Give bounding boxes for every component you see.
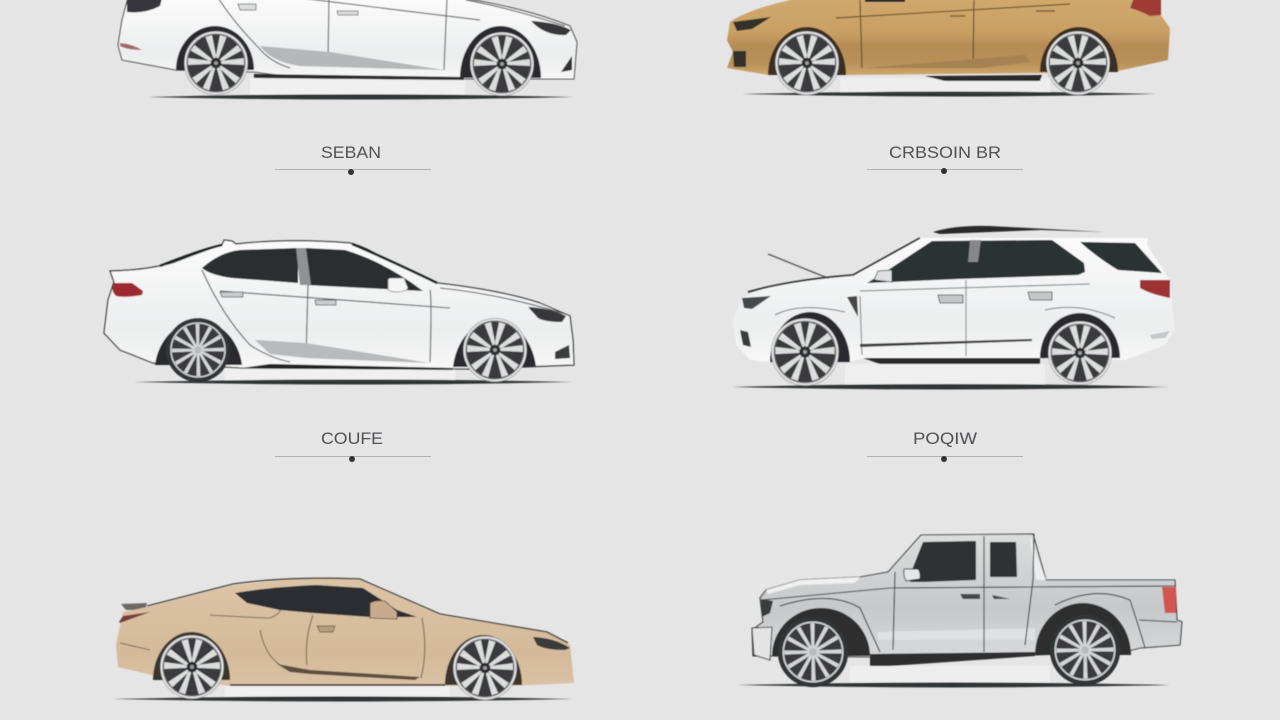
label: COUFE	[275, 429, 431, 462]
crossover front wheel arch	[768, 27, 846, 75]
SUV rear wheel arch	[1040, 313, 1120, 358]
beige coupe rear wheel arch	[153, 632, 230, 680]
SUV body	[733, 238, 1175, 362]
label text: CRBSOIN BR	[889, 143, 1001, 162]
label text: POQIW	[913, 429, 977, 448]
coupe pillar	[296, 248, 311, 285]
crossover body	[727, 0, 1170, 75]
car: white SUV, middle right	[732, 226, 1175, 390]
SUV door handles	[938, 292, 1052, 303]
under-car glow	[225, 368, 455, 380]
coupe sill shading	[255, 340, 430, 363]
ground shadow	[148, 94, 574, 100]
coupe door handles	[220, 292, 336, 305]
car: silver pickup, bottom right	[738, 534, 1182, 688]
divider dot	[941, 456, 947, 462]
pickup front wheel arch	[772, 608, 870, 656]
SUV grille	[740, 330, 751, 347]
pickup headlamp	[761, 599, 773, 617]
crossover rear wheel arch	[1040, 27, 1118, 72]
sedan body	[118, 0, 577, 79]
divider dot	[348, 169, 354, 175]
SUV side windows	[867, 240, 1085, 283]
pickup rear wheel	[1050, 615, 1120, 685]
beige coupe door lines	[120, 610, 425, 678]
SUV rear window	[1080, 242, 1162, 273]
pickup tail lamp	[1162, 587, 1176, 613]
beige coupe sill shade	[277, 664, 420, 680]
label: CRESOIN BR	[867, 143, 1023, 174]
under-car glow	[850, 666, 1050, 682]
coupe rear wheel	[166, 318, 230, 382]
beige coupe underside	[230, 684, 445, 686]
coupe door and belt lines	[202, 270, 565, 362]
pickup rear wheel arch	[1035, 603, 1131, 655]
sedan details	[218, 0, 565, 70]
sedan lower reflector	[120, 43, 142, 50]
SUV roof rail	[933, 226, 1105, 234]
divider line	[867, 169, 1023, 170]
car: gold crossover, top right	[727, 0, 1170, 96]
divider line	[867, 456, 1023, 457]
crossover headlamp	[733, 17, 771, 31]
ground shadow	[742, 92, 1155, 96]
pickup body lines	[762, 534, 1177, 652]
pickup hood highlight	[766, 577, 860, 594]
coupe body	[104, 240, 574, 369]
sedan tail lamp	[127, 0, 162, 12]
coupe front wheel	[463, 318, 527, 382]
ground shadow	[113, 696, 573, 702]
SUV headlamp	[742, 296, 771, 309]
sedan sill shading	[260, 46, 444, 70]
beige coupe door handle	[317, 626, 335, 632]
label text: SEBAN	[321, 143, 381, 162]
SUV fender vent	[847, 296, 858, 317]
crossover front wheel	[775, 31, 839, 95]
pickup front wheel	[778, 617, 848, 687]
sedan underside	[254, 74, 464, 80]
SUV mirror	[874, 270, 892, 282]
crossover details	[836, 0, 1070, 68]
SUV hood edge	[748, 238, 920, 292]
SUV rear reflector	[1150, 331, 1170, 339]
crossover underside	[925, 75, 1042, 81]
under-car glow	[250, 78, 465, 94]
coupe roof line	[160, 244, 437, 283]
sedan door handles	[238, 4, 358, 15]
crossover rear wheel	[1046, 31, 1110, 95]
sedan rear wheel arch	[176, 26, 254, 70]
sedan grille	[561, 56, 572, 72]
label text: COUFE	[321, 429, 383, 448]
coupe front window	[306, 248, 423, 291]
ground shadow	[732, 384, 1168, 390]
pickup door handles	[960, 594, 1010, 599]
pickup mirror	[904, 569, 920, 581]
pickup front bumper	[752, 627, 772, 660]
coupe headlamp	[528, 307, 566, 322]
pickup cab highlight	[1030, 536, 1046, 580]
crossover window sliver	[865, 0, 905, 2]
ground shadow	[134, 380, 572, 384]
label: POQIW	[867, 429, 1023, 462]
beige coupe headlamp	[533, 637, 570, 650]
car: white coupe-style sedan, middle left	[104, 240, 574, 384]
divider dot	[941, 168, 947, 174]
beige coupe body	[116, 577, 574, 686]
car: beige coupe, bottom left	[113, 577, 574, 702]
car: white sedan, top left	[118, 0, 577, 100]
ground shadow	[738, 682, 1170, 688]
beige coupe mirror	[370, 601, 397, 619]
coupe mirror	[388, 278, 408, 292]
coupe rear window	[202, 248, 298, 283]
SUV front wheel	[771, 318, 839, 386]
SUV side strip	[860, 339, 1032, 347]
coupe grille	[555, 345, 570, 359]
pickup front window	[910, 541, 976, 582]
label: SEBAN	[275, 143, 431, 175]
beige coupe tail lamp	[119, 612, 150, 623]
divider line	[275, 169, 431, 170]
SUV underside	[863, 358, 1040, 364]
sedan front wheel	[470, 32, 534, 96]
pickup lower highlight	[878, 628, 1035, 640]
sedan front wheel arch	[460, 26, 541, 78]
coupe front wheel arch	[453, 320, 536, 367]
sedan rear wheel	[184, 31, 248, 95]
SUV open hood line	[768, 254, 830, 279]
SUV rear wheel	[1048, 321, 1112, 385]
divider dot	[349, 456, 355, 462]
pickup rear window	[990, 542, 1017, 577]
crossover tail lamp	[1130, 0, 1161, 16]
pickup body	[752, 534, 1182, 657]
beige coupe front wheel	[453, 636, 517, 700]
divider line	[275, 456, 431, 457]
spoiler	[121, 603, 147, 610]
SUV front wheel arch	[770, 312, 850, 362]
beige coupe rear wheel	[160, 635, 224, 699]
coupe underside	[242, 364, 453, 370]
under-car glow	[845, 364, 1045, 384]
beige coupe front wheel arch	[445, 635, 522, 685]
under-car glow	[225, 686, 450, 696]
SUV pillar	[968, 240, 981, 262]
coupe rear wheel arch	[155, 321, 242, 365]
crossover lower shade	[862, 55, 1030, 68]
SUV tail lamp	[1140, 280, 1170, 298]
pickup underside	[870, 652, 1035, 666]
coupe tail lamp	[112, 283, 143, 297]
beige coupe roof line	[147, 578, 568, 643]
beige coupe window	[235, 585, 417, 617]
SUV door lines	[775, 280, 1115, 356]
sedan headlamp	[531, 21, 571, 35]
under-car glow	[840, 78, 1050, 92]
crossover grille	[733, 51, 746, 67]
